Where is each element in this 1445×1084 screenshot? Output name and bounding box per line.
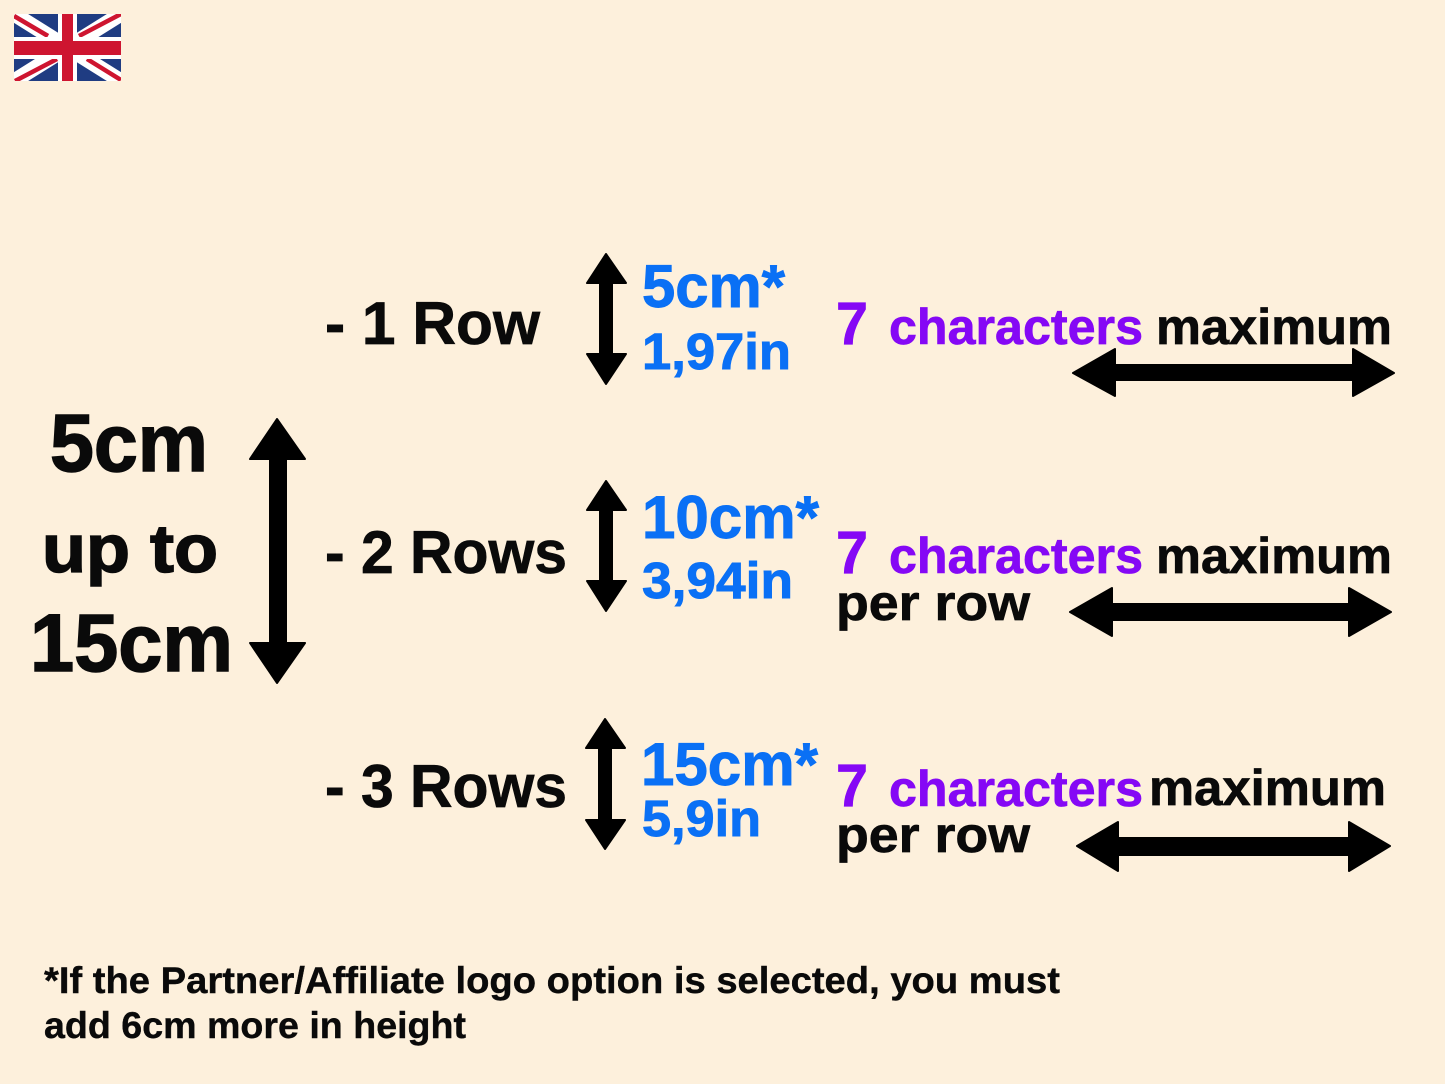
text: 7 characters xyxy=(836,519,1143,586)
footnote: *If the Partner/Affiliate logo option is selected, you must xyxy=(44,960,1060,1001)
text: 7 characters xyxy=(836,752,1143,819)
size: 1,97in: 1,97in xyxy=(642,323,791,380)
overall height label: up to xyxy=(42,511,218,587)
text: 7 characters: characters xyxy=(889,299,1143,355)
text: maximum: maximum xyxy=(1156,299,1392,355)
label: 1 Row: - 1 Row xyxy=(325,290,540,357)
arrow: width xyxy=(1073,349,1394,396)
arrow: 3 rows height xyxy=(586,719,625,849)
size: 5,9in: 5,9in xyxy=(642,790,761,847)
size: 10cm: 10cm* xyxy=(642,484,820,551)
text: per row: per row xyxy=(836,575,1030,631)
text: maximum: maximum xyxy=(1149,760,1386,816)
footnote xyxy=(44,960,1060,1046)
text: per row: per row xyxy=(836,807,1030,863)
row 3 group xyxy=(325,719,1390,871)
icon: UK flag xyxy=(14,14,121,81)
arrow: width xyxy=(1070,588,1391,636)
overall height label xyxy=(30,398,233,689)
row 2 group xyxy=(325,481,1392,636)
text: 7 characters xyxy=(836,290,1143,357)
text: 7 characters: characters xyxy=(889,761,1143,817)
overall height label: 15cm xyxy=(30,598,233,689)
size: 3,94in: 3,94in xyxy=(642,552,793,609)
text: 7 characters: 7 xyxy=(836,752,868,819)
size: 15cm: 15cm* xyxy=(641,731,819,798)
row 1 group xyxy=(325,253,1394,396)
label: 3 Rows: - 3 Rows xyxy=(325,753,567,820)
arrow: 1 row height xyxy=(587,254,626,384)
arrow: overall height xyxy=(250,419,305,683)
arrow: width xyxy=(1077,822,1390,871)
size: 5cm: 5cm* xyxy=(642,253,786,320)
arrow: 2 rows height xyxy=(587,481,626,611)
text: maximum: maximum xyxy=(1156,528,1392,584)
label: 2 Rows: - 2 Rows xyxy=(325,519,567,586)
footnote: add 6cm more in height xyxy=(44,1005,466,1046)
overall height label: 5cm xyxy=(50,398,208,489)
text: 7 characters: 7 xyxy=(836,519,868,586)
text: 7 characters: characters xyxy=(889,528,1143,584)
text: 7 characters: 7 xyxy=(836,290,868,357)
